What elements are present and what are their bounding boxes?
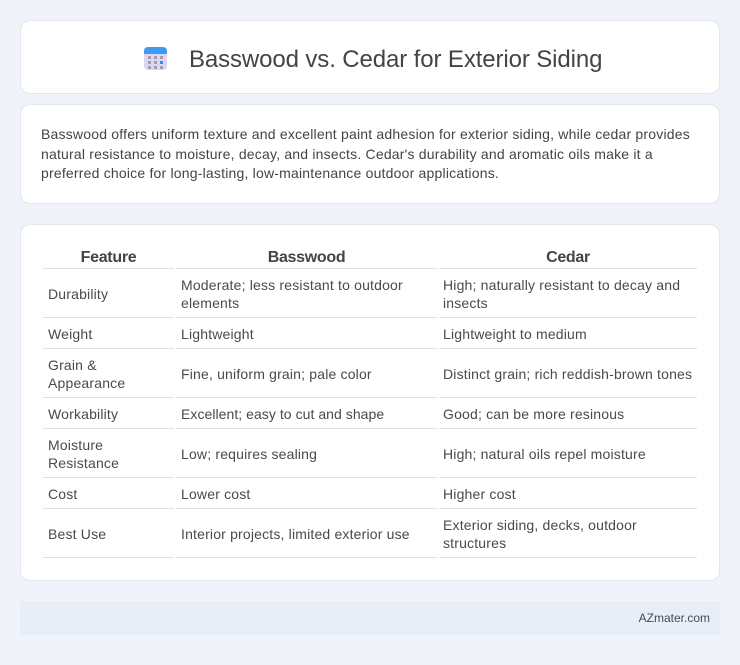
Durability cedar <box>443 277 680 311</box>
Best Use cedar: Exterior siding, decks, outdoor <box>443 517 637 533</box>
intro text: natural resistance to moisture, decay, and insects. Cedar's durability and aromatic oils make it a <box>41 146 653 162</box>
Moisture cedar: High; natural oils repel moisture <box>443 446 646 462</box>
Cost cedar: Higher cost <box>443 486 516 502</box>
Workability basswood: Excellent; easy to cut and shape <box>181 406 384 422</box>
row: Grain & Appearance: Appearance <box>48 375 125 391</box>
footer bar <box>20 601 720 635</box>
header: Basswood: Basswood <box>268 248 345 266</box>
header: Feature: Feature <box>81 248 136 266</box>
intro text panel <box>20 104 720 204</box>
Workability cedar: Good; can be more resinous <box>443 406 624 422</box>
Best Use cedar <box>443 517 637 551</box>
row: Grain & Appearance: Grain & <box>48 357 97 373</box>
Durability cedar: High; naturally resistant to decay and <box>443 277 680 293</box>
Best Use basswood: Interior projects, limited exterior use <box>181 526 410 542</box>
title panel <box>20 20 720 94</box>
Cost basswood: Lower cost <box>181 486 250 502</box>
table panel <box>20 224 720 581</box>
row: Moisture Resistance <box>48 437 119 471</box>
row: Moisture Resistance: Resistance <box>48 455 119 471</box>
row: Best Use: Best Use <box>48 526 106 542</box>
Moisture basswood: Low; requires sealing <box>181 446 317 462</box>
Grain cedar: Distinct grain; rich reddish-brown tones <box>443 366 692 382</box>
Weight cedar: Lightweight to medium <box>443 326 587 342</box>
Durability cedar: insects <box>443 295 488 311</box>
intro text: Basswood offers uniform texture and excellent paint adhesion for exterior siding, while cedar provides <box>41 126 690 142</box>
row: Moisture Resistance: Moisture <box>48 437 103 453</box>
Grain basswood: Fine, uniform grain; pale color <box>181 366 372 382</box>
row: Grain & Appearance <box>48 357 125 391</box>
row: Cost: Cost <box>48 486 78 502</box>
title: Basswood vs. Cedar for Exterior Siding <box>189 46 602 73</box>
intro text: preferred choice for long-lasting, low-maintenance outdoor applications. <box>41 165 499 181</box>
footer source: AZmater.com <box>639 611 710 625</box>
Durability basswood: elements <box>181 295 239 311</box>
icon: calendar <box>144 47 167 70</box>
Weight basswood: Lightweight <box>181 326 254 342</box>
header: Cedar: Cedar <box>546 248 590 266</box>
intro text <box>41 126 690 181</box>
row: Weight: Weight <box>48 326 92 342</box>
Durability basswood: Moderate; less resistant to outdoor <box>181 277 403 293</box>
row: Durability: Durability <box>48 286 108 302</box>
Durability basswood <box>181 277 403 311</box>
Best Use cedar: structures <box>443 535 506 551</box>
row: Workability: Workability <box>48 406 118 422</box>
